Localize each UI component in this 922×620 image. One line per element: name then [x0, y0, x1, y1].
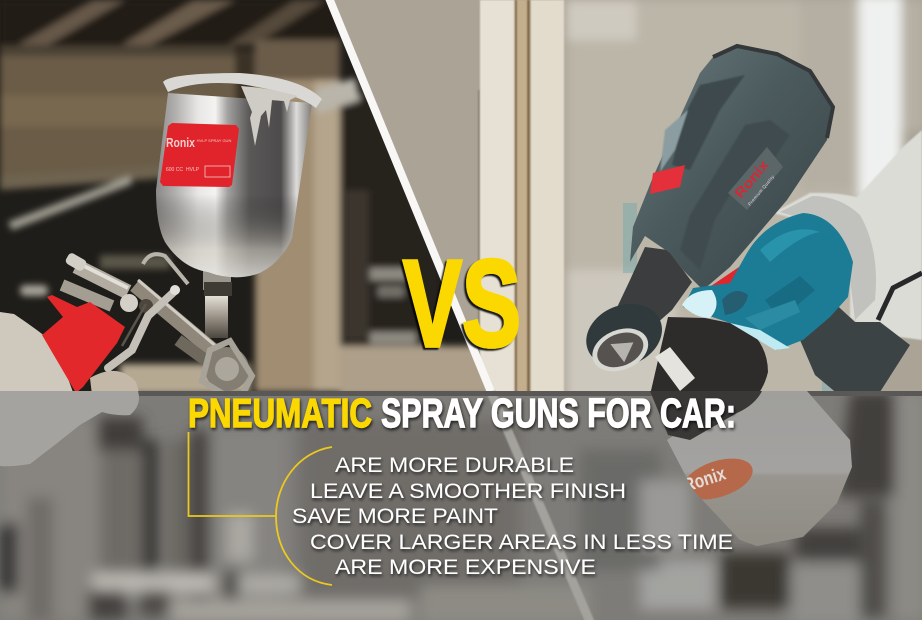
icon: paint drips [241, 86, 298, 146]
list item: durable: ARE MORE DURABLE [335, 454, 574, 477]
pneumatic spray gun [0, 73, 322, 403]
icon: glove highlights [682, 229, 820, 350]
icon: cup rim [163, 73, 322, 108]
bottle logo: Ronix [681, 463, 729, 497]
label: red cup label: Ronix [166, 135, 196, 150]
electric spray gun [586, 44, 922, 391]
list item: coverage: COVER LARGER AREAS IN LESS TIME [310, 531, 733, 554]
list item: expensive: ARE MORE EXPENSIVE [335, 556, 596, 579]
VS heading: VS [403, 236, 521, 373]
heading: pneumatic spray guns for car: PNEUMATIC [188, 390, 372, 436]
icon: spray gun barrels [62, 252, 252, 403]
list of characteristics [292, 454, 733, 579]
faded paint bottle [650, 391, 852, 546]
label: red cup label: HVLP [186, 167, 200, 173]
icon: fingers [90, 370, 139, 391]
icon: paint bottle lid [650, 317, 768, 391]
icon: nozzle neck [618, 247, 692, 320]
label: logo plate: Premium Quality [747, 174, 776, 207]
icon: sleeve fold [780, 196, 876, 320]
background: blurred scene under caption [0, 391, 922, 620]
icon: power switch [650, 165, 685, 194]
label: red cup label: 600 CC [166, 167, 183, 173]
connector bracket [188, 432, 332, 585]
background: left photo [0, 0, 500, 396]
heading: pneumatic spray guns for car [188, 390, 736, 436]
label: logo plate [728, 147, 783, 210]
icon: nozzle ring [586, 304, 662, 372]
icon: teal reflection [623, 203, 838, 392]
icon: red handle [42, 295, 125, 393]
icon: aluminium paint cup [156, 93, 312, 277]
list item: paint: SAVE MORE PAINT [292, 505, 498, 528]
faded glove in caption band [0, 391, 139, 466]
faded bottle lid [650, 391, 762, 440]
bottle logo [686, 458, 753, 500]
band top edge [0, 391, 922, 396]
label: red cup label: HVLP SPRAY GUN [197, 138, 231, 143]
icon: rear handle [800, 307, 910, 391]
icon: sleeve [773, 130, 922, 340]
icon: motor housing [630, 45, 833, 290]
icon: glove hand [0, 312, 74, 395]
icon: blue glove [683, 213, 853, 350]
icon: paint cup stem [203, 268, 232, 338]
icon: housing panels [660, 75, 790, 270]
background: right photo [320, 0, 922, 400]
list item: finish: LEAVE A SMOOTHER FINISH [310, 480, 626, 503]
label: red cup label [160, 123, 239, 187]
icon: housing rim [713, 46, 833, 138]
icon: red trigger [712, 266, 740, 286]
icon: cup shading [156, 198, 298, 278]
diagonal divider line [329, 0, 590, 620]
icon: power cord [878, 273, 922, 320]
heading: pneumatic spray guns for car: SPRAY GUNS FOR CAR: [381, 390, 736, 436]
icon: bottle tube [655, 347, 695, 391]
label: logo plate: Ronix [731, 157, 772, 201]
